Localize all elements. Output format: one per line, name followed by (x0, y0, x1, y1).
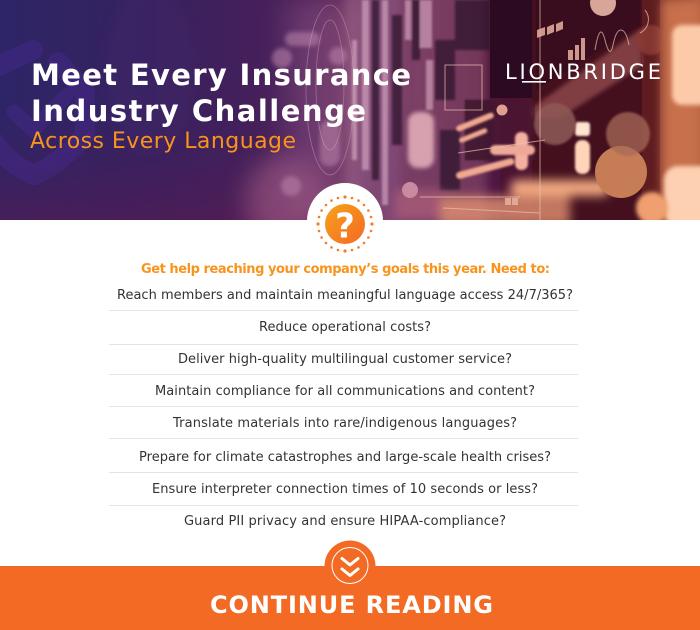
head silhouette (105, 0, 195, 155)
peach highlights (455, 112, 590, 180)
blurred pink block (408, 112, 434, 168)
list of questions: Guard PII privacy and ensure HIPAA-compliance? (184, 514, 506, 529)
bokeh circles (595, 146, 647, 198)
title: Meet Every Insurance (31, 58, 411, 92)
chart lines (420, 0, 648, 220)
server columns (345, 0, 485, 230)
list of questions: Reach members and maintain meaningful language access 24/7/365? (117, 288, 573, 303)
shield watermark (0, 50, 85, 175)
list of questions: Deliver high-quality multilingual customer service? (178, 352, 512, 367)
dark panels (490, 0, 532, 98)
list of questions (109, 288, 578, 529)
icon: question badge: ? (335, 206, 355, 246)
list of questions: Ensure interpreter connection times of 10 seconds or less? (152, 482, 538, 497)
icon: question badge (307, 183, 383, 253)
right bright bokeh (662, 0, 700, 220)
list of questions: Reduce operational costs? (259, 320, 431, 335)
logo: Lionbridge: LIONBRIDGE (505, 60, 661, 84)
footer bar (0, 566, 700, 630)
title (31, 58, 411, 128)
left tech glow (270, 0, 360, 220)
icon: chevrons down (324, 540, 376, 592)
list of questions: Maintain compliance for all communications and content? (155, 384, 535, 399)
rings (306, 5, 354, 175)
header banner background (0, 0, 700, 220)
white content panel (0, 220, 700, 566)
diagonal chart wall (532, 28, 642, 118)
list of questions: Translate materials into rare/indigenous languages? (172, 416, 517, 431)
heading: get help: Get help reaching your company’s goals this year. Need to: (141, 262, 550, 277)
call to action: CONTINUE READING (210, 591, 493, 619)
subtitle: Across Every Language (30, 129, 296, 154)
list of questions: Prepare for climate catastrophes and large-scale health crises? (139, 450, 551, 465)
title: Industry Challenge (31, 94, 366, 128)
